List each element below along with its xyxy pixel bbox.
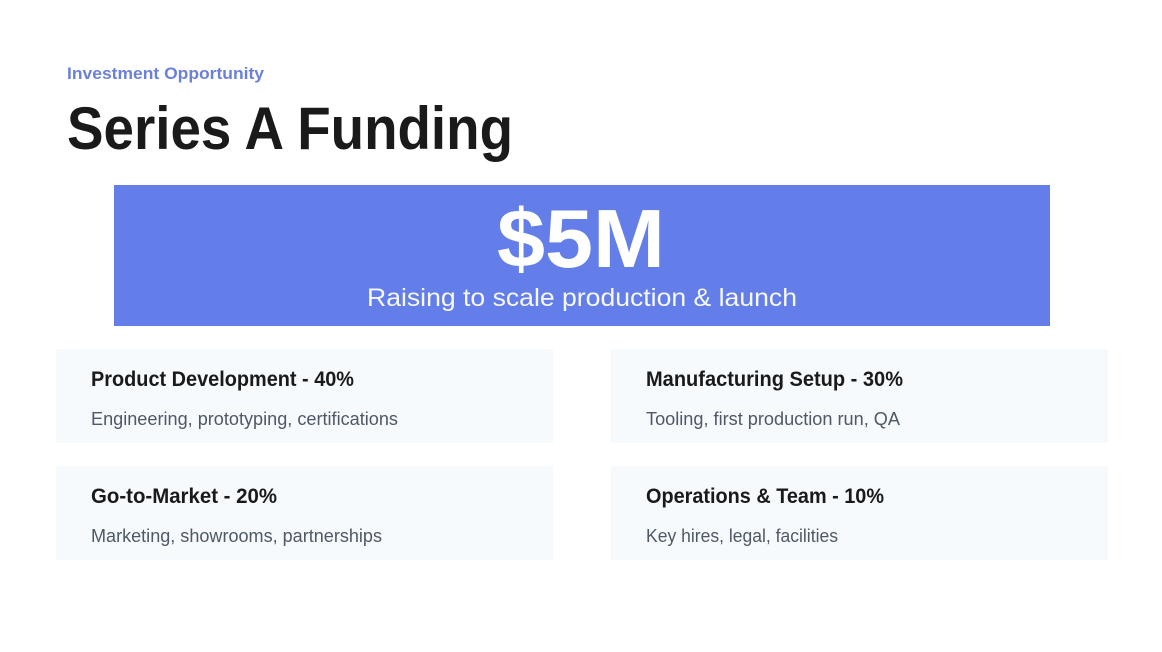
card description: Marketing, showrooms, partnerships [91, 526, 382, 546]
panel: go-to-market [56, 466, 553, 560]
card heading: Product Development - 40% [91, 368, 354, 391]
card heading: Go-to-Market - 20% [91, 485, 277, 508]
card heading: Operations & Team - 10% [646, 485, 884, 508]
eyebrow label: Investment Opportunity [67, 64, 265, 83]
panel: manufacturing setup [611, 349, 1108, 443]
banner background [114, 185, 1050, 326]
panel: funding amount banner [114, 185, 1050, 326]
card background [56, 466, 553, 560]
card heading: Manufacturing Setup - 30% [646, 368, 903, 391]
card description: Key hires, legal, facilities [646, 526, 838, 546]
funding amount: $5M [497, 192, 665, 285]
card background [611, 349, 1108, 443]
card description: Tooling, first production run, QA [646, 409, 900, 429]
funding purpose: Raising to scale production & launch [367, 284, 797, 312]
card background [611, 466, 1108, 560]
card description: Engineering, prototyping, certifications [91, 409, 398, 429]
panel: operations and team [611, 466, 1108, 560]
title: Series A Funding [67, 95, 513, 162]
panel: product development [56, 349, 553, 443]
card background [56, 349, 553, 443]
